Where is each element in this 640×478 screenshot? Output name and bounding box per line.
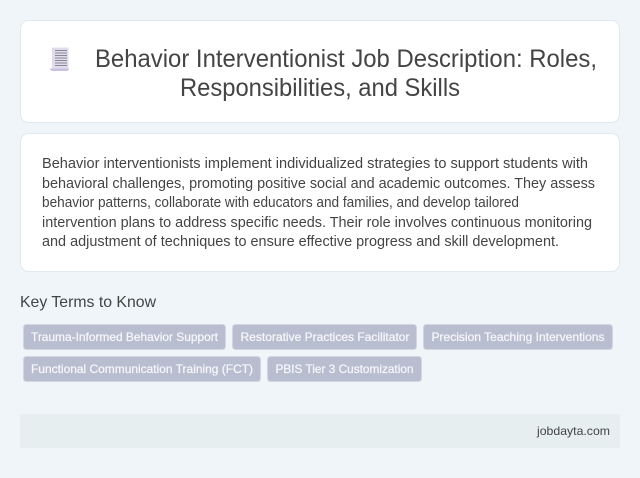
panel: header card <box>20 20 620 122</box>
panel: description card <box>20 134 620 272</box>
title: Responsibilities, and Skills <box>180 74 460 102</box>
tags: key terms <box>24 324 612 382</box>
text block: description: behavioral challenges, promoting positive social and academic outcomes. They assess <box>42 176 595 192</box>
tag: trauma-informed <box>24 324 226 350</box>
tag: precision teaching: Precision Teaching Interventions <box>432 330 604 344</box>
tag: restorative practices: Restorative Practices Facilitator <box>240 330 410 344</box>
title: Behavior Interventionist Job Description: Roles, <box>95 45 597 73</box>
text block: description: behavior patterns, collaborate with educators and families, and develop tailored <box>42 195 519 211</box>
text block: description: Behavior interventionists implement individualized strategies to support students with <box>42 156 588 172</box>
icon: document scroll <box>50 48 69 71</box>
text block: description: intervention plans to address specific needs. Their role involves continuous monitoring <box>42 215 592 231</box>
heading: key terms: Key Terms to Know <box>20 294 156 311</box>
tag: pbis tier 3: PBIS Tier 3 Customization <box>276 362 414 376</box>
tag: precision teaching <box>424 324 612 350</box>
footer text: source: jobdayta.com <box>536 424 610 438</box>
tag: pbis tier 3 <box>268 356 422 382</box>
footer bar <box>20 414 620 448</box>
text block: description <box>42 156 595 250</box>
title <box>95 45 597 102</box>
tag: trauma-informed: Trauma-Informed Behavior Support <box>31 330 219 344</box>
text block: description: and adjustment of techniques to ensure effective progress and skill development. <box>42 234 559 250</box>
tag: functional communication <box>24 356 260 382</box>
tag: restorative practices <box>232 324 416 350</box>
tag: functional communication: Functional Communication Training (FCT) <box>31 362 253 376</box>
